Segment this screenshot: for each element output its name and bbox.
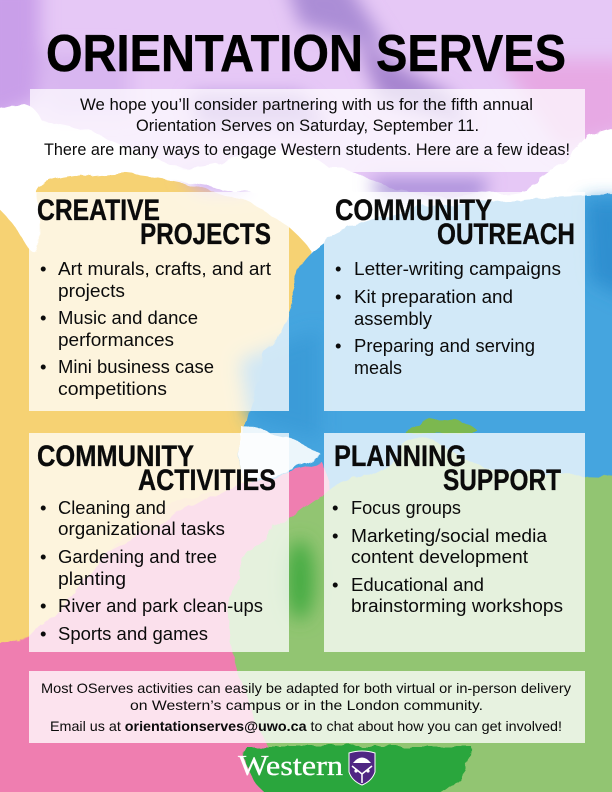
panel: intro [30,89,585,172]
icon: Western shield [349,751,375,785]
heading: community outreach: COMMUNITY [335,194,492,227]
list: creative projects: • [40,307,46,328]
list: creative projects: projects [58,280,125,301]
list: community activities: organizational tasks [58,518,225,539]
panel: intro: There are many ways to engage Western students. Here are a few ideas! [44,140,570,159]
panel: intro: Orientation Serves on Saturday, September 11. [136,116,479,135]
list: planning support: • [332,525,338,546]
list: creative projects: • [40,258,46,279]
panel: planning support [324,433,585,652]
list: community activities: River and park clean-ups [58,595,263,616]
panel: creative projects [29,192,289,411]
list: community outreach: • [335,286,341,307]
list: planning support [332,497,563,616]
list: planning support: • [332,574,338,595]
panel: community outreach [324,192,585,411]
panel: footer note [29,671,585,743]
list: creative projects: performances [58,329,174,350]
list: creative projects: Music and dance [58,307,198,328]
wash: white right [530,118,612,198]
list: creative projects: competitions [58,378,167,399]
list: community activities: • [40,497,46,518]
list: planning support: brainstorming workshops [351,595,563,616]
wash: green top [405,418,480,433]
heading: community activities: COMMUNITY [37,440,194,473]
heading: planning support [334,440,561,497]
list: community outreach: Letter-writing campaigns [354,258,561,279]
list: community outreach: • [335,258,341,279]
wash: blue [240,195,612,530]
heading: planning support: PLANNING [334,440,466,473]
list: planning support: Marketing/social media [351,525,548,546]
heading: community outreach [335,194,575,251]
heading: creative projects: PROJECTS [140,218,271,251]
list: community activities: Gardening and tree [58,546,217,567]
heading: community activities [37,440,276,497]
wash: white drips [0,105,344,251]
wash: purple shading [0,0,612,197]
heading: creative projects: CREATIVE [37,194,160,227]
list: planning support: • [332,497,338,518]
heading: community outreach: OUTREACH [437,218,575,251]
list: community outreach: • [335,335,341,356]
list: community outreach [335,258,561,378]
panel: footer note: on Western’s campus or in the London community. [130,697,483,713]
list: community outreach: assembly [354,308,433,329]
list: planning support: content development [351,546,528,567]
heading: creative projects [37,194,271,251]
wash: yellow over pink [110,430,238,550]
list: community activities: • [40,595,46,616]
wash: purple [0,0,612,196]
wash: dark green [244,745,470,792]
list: community activities: Cleaning and [58,497,166,518]
list: community activities: • [40,623,46,644]
list: creative projects: Mini business case [58,356,214,377]
wash: pink [0,462,360,792]
panel: community activities [29,433,289,652]
logo: Western wordmark: Western [238,750,344,782]
list: community outreach: meals [354,357,402,378]
list: creative projects [40,258,271,399]
heading: community activities: ACTIVITIES [138,464,276,497]
list: community activities: planting [58,568,126,589]
list: creative projects: • [40,356,46,377]
title: ORIENTATION SERVES [46,25,566,83]
list: community outreach: Preparing and serving [354,335,535,356]
wash: yellow [0,172,310,660]
heading: planning support: SUPPORT [443,464,561,497]
wash: blue shading [240,200,612,440]
panel: intro: We hope you’ll consider partnering with us for the fifth annual [80,95,533,114]
wash: white patch [240,425,322,480]
panel: footer note: Most OServes activities can easily be adapted for both virtual or in-person delivery [41,680,571,696]
list: community activities: Sports and games [58,623,208,644]
list: planning support: Focus groups [351,497,461,518]
list: creative projects: Art murals, crafts, and art [58,258,271,279]
list: planning support: Educational and [351,574,484,595]
panel: footer note: Email us at orientationserves@uwo.ca to chat about how you can get involved! [50,718,562,734]
list: community outreach: Kit preparation and [354,286,513,307]
list: community activities: • [40,546,46,567]
wash: green [228,437,612,792]
list: community activities [40,497,263,644]
